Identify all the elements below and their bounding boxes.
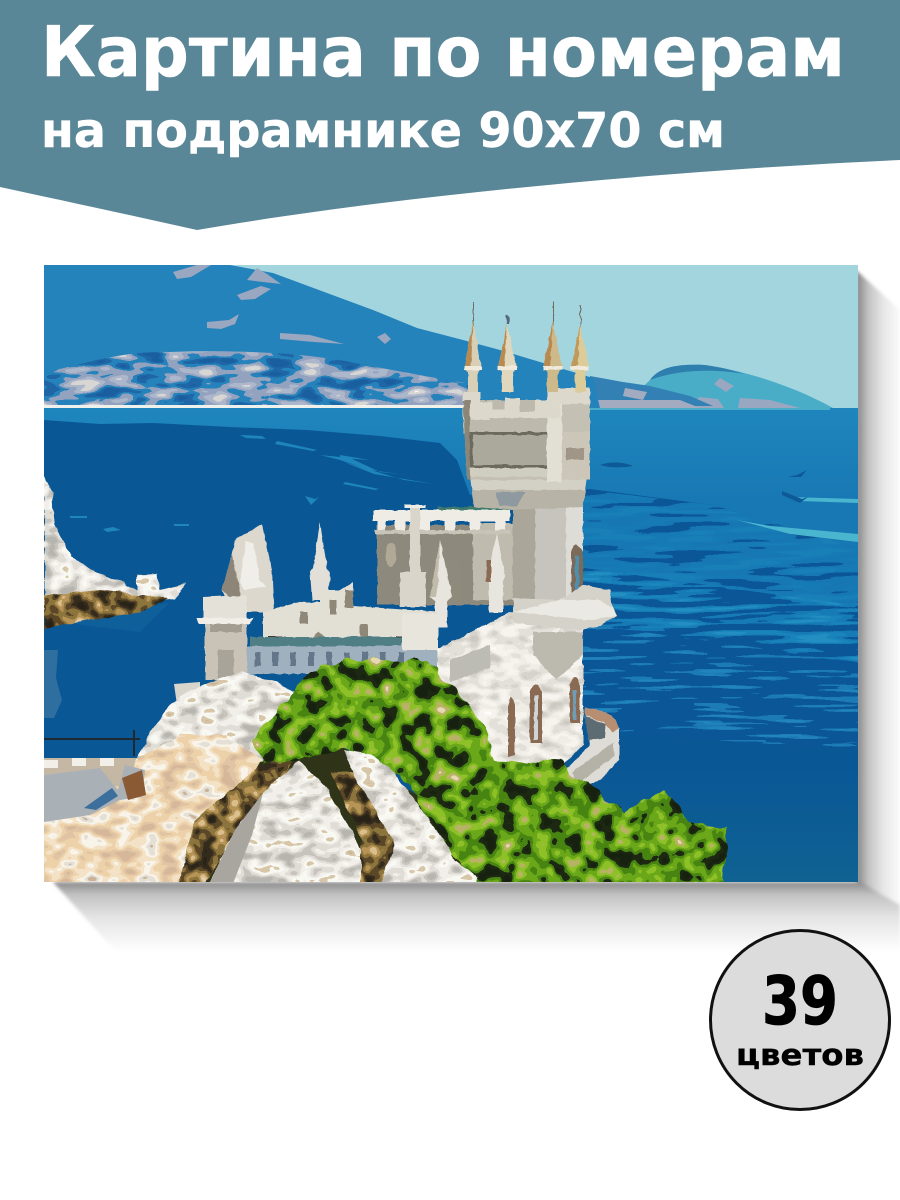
shaded boulder bbox=[44, 765, 145, 822]
colours label: цветов bbox=[736, 1038, 864, 1072]
spire 1 bbox=[464, 302, 482, 392]
checker parapet bbox=[44, 758, 114, 768]
wall shade and windows bbox=[450, 632, 583, 757]
upper block bbox=[373, 505, 513, 607]
dark gaps bbox=[268, 636, 411, 642]
canvas shadow bbox=[53, 270, 900, 952]
terrace wall bbox=[44, 758, 144, 786]
lower white wall bbox=[436, 612, 583, 780]
sky bbox=[44, 265, 858, 410]
arcade arches bbox=[255, 652, 404, 666]
main tower bbox=[463, 388, 590, 604]
boulder shade bbox=[208, 793, 263, 886]
tower upper window bbox=[571, 544, 583, 600]
battlements bbox=[263, 582, 437, 642]
colour count badge bbox=[710, 930, 890, 1110]
detached rock pinnacle bbox=[222, 524, 274, 612]
rock base bbox=[44, 590, 168, 628]
front spires bbox=[430, 533, 505, 628]
rear boulder bbox=[343, 750, 477, 886]
foreground backing bbox=[44, 760, 240, 882]
deep sea bbox=[44, 420, 858, 882]
painting: castle by the sea bbox=[44, 265, 858, 882]
header banner bbox=[0, 0, 900, 230]
left cliff bbox=[40, 672, 305, 886]
distant headland bbox=[590, 365, 833, 408]
foreground rocks bbox=[208, 750, 477, 886]
blue crevice bbox=[84, 788, 118, 810]
subtitle: на подрамнике 90х70 см bbox=[41, 103, 725, 159]
mountain patches bbox=[173, 265, 391, 344]
sea ripples bbox=[44, 435, 858, 750]
dark gap between rocks bbox=[330, 770, 420, 886]
greenery bbox=[254, 660, 727, 890]
left rock in sea bbox=[44, 473, 185, 628]
wall top strip bbox=[250, 637, 425, 646]
number of colours: 39 bbox=[762, 962, 838, 1040]
brown patch bbox=[122, 770, 146, 800]
castle bbox=[197, 302, 619, 790]
dark backing behind shrubs bbox=[190, 745, 490, 886]
seaside town bbox=[44, 351, 475, 407]
spire 3 bbox=[543, 302, 562, 392]
fence bbox=[44, 730, 140, 756]
merlon shadows bbox=[300, 590, 415, 641]
small spire bbox=[310, 522, 330, 600]
dark shrubs on slope bbox=[178, 755, 295, 886]
title: Картина по номерам bbox=[41, 12, 845, 93]
block on battlement bbox=[402, 614, 438, 650]
small wall bbox=[174, 682, 200, 712]
lower balcony bbox=[565, 707, 619, 790]
white boulder bbox=[208, 760, 361, 886]
arcade bbox=[247, 646, 437, 674]
left turret bbox=[197, 595, 253, 680]
upper white rock bbox=[136, 672, 305, 766]
spire 4 bbox=[571, 305, 589, 392]
spire 2 bbox=[498, 315, 517, 392]
shoreline bbox=[44, 405, 514, 408]
upper sea bbox=[44, 408, 858, 882]
main mountain bbox=[44, 265, 600, 408]
balcony highlight bbox=[513, 600, 617, 620]
tan rock bbox=[40, 735, 262, 886]
upper balcony bbox=[513, 585, 617, 630]
